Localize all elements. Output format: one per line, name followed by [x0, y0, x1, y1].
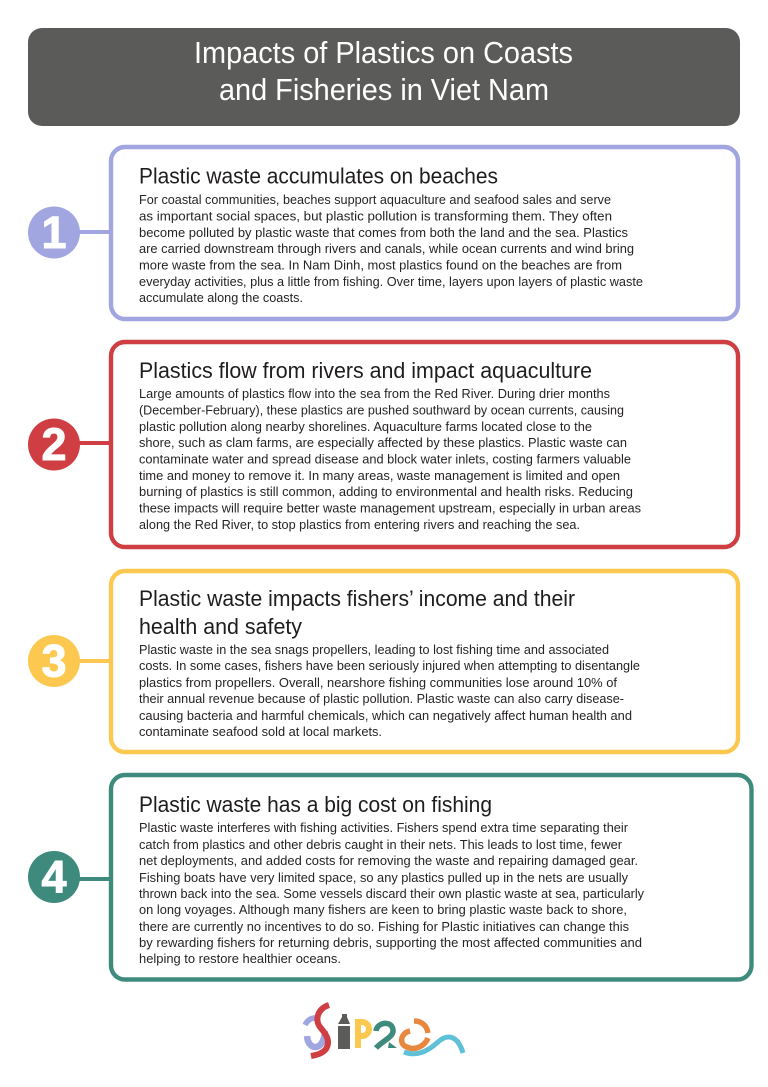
- body text 4: Plastic waste interferes with fishing activities. Fishers spend extra time separating their: [139, 820, 629, 835]
- card 1 outline: [111, 147, 738, 319]
- body text 1: are carried downstream through rivers and canals, while ocean currents and wind bring: [139, 241, 634, 256]
- body text 2: Large amounts of plastics flow into the sea from the Red River. During drier months: [139, 386, 610, 401]
- body text 2: time and money to remove it. In many areas, waste management is limited and open: [139, 468, 620, 483]
- body text 2: shore, such as clam farms, are especially affected by these plastics. Plastic waste can: [139, 435, 627, 450]
- body text 1: become polluted by plastic waste that comes from both the land and the sea. Plastics: [139, 225, 628, 240]
- logo: [305, 1005, 463, 1056]
- body text 2: burning of plastics is still common, adding to environmental and health risks. Reducing: [139, 484, 633, 499]
- number badge 4: 4: [41, 852, 67, 902]
- title banner: [28, 28, 740, 126]
- body text 4: [139, 820, 645, 966]
- body text 2: [139, 386, 641, 532]
- number badge 4: [28, 851, 112, 903]
- body text 2: along the Red River, to stop plastics from entering rivers and reaching the sea.: [139, 517, 580, 532]
- body text 1: as important social spaces, but plastic pollution is transforming them. They often: [139, 208, 612, 224]
- body text 4: by rewarding fishers for returning debris, supporting the most affected communities and: [139, 935, 642, 950]
- body text 3: [139, 642, 640, 739]
- body text 2: contaminate water and spread disease and block water inlets, costing farmers valuable: [139, 452, 631, 466]
- body text 3: contaminate seafood sold at local markets.: [139, 724, 382, 739]
- heading 3: [139, 586, 575, 639]
- number badge 3: [28, 635, 112, 687]
- card 3 outline: [111, 571, 738, 752]
- heading 4: Plastic waste has a big cost on fishing: [139, 792, 492, 817]
- body text 3: plastics from propellers. Overall, nearshore fishing communities lose around 10% of: [139, 675, 617, 690]
- number badge 1: [28, 206, 112, 258]
- body text 2: these impacts will require better waste management upstream, especially in urban areas: [139, 500, 641, 516]
- panel 3: income, health and safety: [28, 571, 738, 752]
- heading 3: health and safety: [139, 614, 302, 639]
- body text 1: [139, 192, 643, 305]
- body text 4: Fishing boats have very limited space, so any plastics pulled up in the nets are usually: [139, 870, 629, 885]
- heading 3: Plastic waste impacts fishers’ income and their: [139, 586, 575, 611]
- body text 1: accumulate along the coasts.: [139, 290, 303, 305]
- title banner: Impacts of Plastics on Coasts: [194, 36, 573, 70]
- body text 1: more waste from the sea. In Nam Dinh, most plastics found on the beaches are from: [139, 258, 622, 272]
- card 2 outline: [111, 342, 738, 547]
- body text 3: costs. In some cases, fishers have been seriously injured when attempting to disentangle: [139, 658, 640, 673]
- panel 2: rivers and aquaculture: [28, 342, 738, 547]
- body text 4: helping to restore healthier oceans.: [139, 951, 341, 966]
- body text 3: Plastic waste in the sea snags propellers, leading to lost fishing time and associated: [139, 642, 609, 657]
- heading 2: Plastics flow from rivers and impact aquaculture: [139, 358, 592, 383]
- body text 4: on long voyages. Although many fishers are keen to bring plastic waste back to shore,: [139, 902, 627, 917]
- number badge 2: 2: [41, 419, 67, 470]
- panel 1: beaches: [28, 147, 738, 319]
- body text 4: catch from plastics and other debris caught in their nets. This leads to lost time, fewer: [139, 837, 623, 852]
- body text 4: there are currently no incentives to do so. Fishing for Plastic initiatives can change this: [139, 919, 629, 934]
- panel 4: cost on fishing: [28, 775, 752, 980]
- body text 2: plastic pollution along nearby shorelines. Aquaculture farms located close to the: [139, 419, 592, 434]
- body text 2: (December-February), these plastics are pushed southward by ocean currents, causing: [139, 402, 624, 418]
- title banner: and Fisheries in Viet Nam: [219, 73, 549, 107]
- body text 4: net deployments, and added costs for removing the waste and repairing damaged gear.: [139, 853, 638, 868]
- number badge 3: 3: [41, 636, 67, 686]
- number badge 2: [28, 418, 112, 470]
- number badge 1: 1: [41, 207, 67, 258]
- body text 1: For coastal communities, beaches support aquaculture and seafood sales and serve: [139, 192, 611, 207]
- body text 3: their annual revenue because of plastic pollution. Plastic waste can also carry disease-: [139, 691, 624, 706]
- body text 1: everyday activities, plus a little from fishing. Over time, layers upon layers of plastic waste: [139, 274, 643, 289]
- body text 3: causing bacteria and harmful chemicals, which can negatively affect human health and: [139, 708, 632, 723]
- heading 1: Plastic waste accumulates on beaches: [139, 164, 498, 188]
- card 4 outline: [111, 775, 752, 980]
- body text 4: thrown back into the sea. Some vessels discard their own plastic waste at sea, particularly: [139, 886, 645, 901]
